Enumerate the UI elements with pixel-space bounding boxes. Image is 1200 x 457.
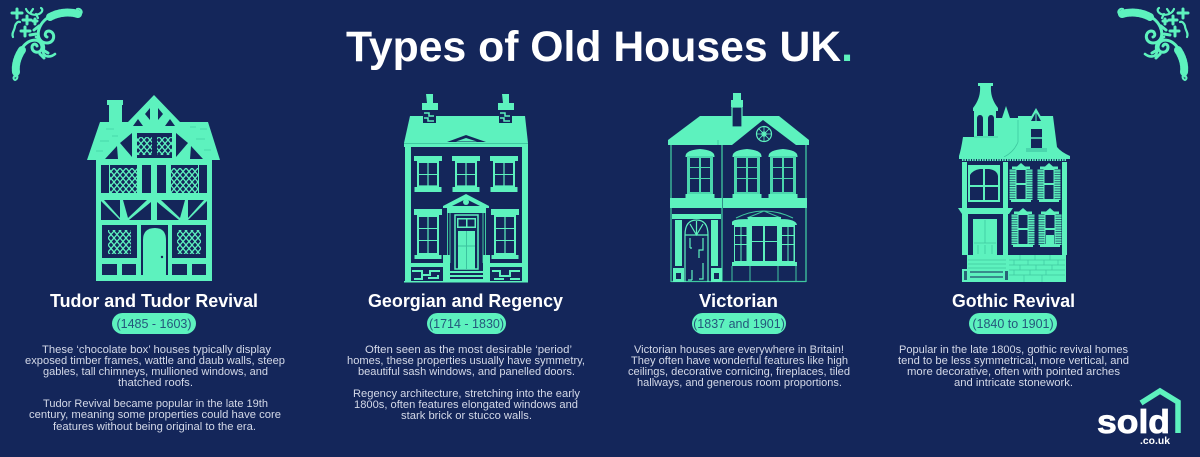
logo: sold.co.uk: sold <box>1097 403 1170 440</box>
date pill <box>969 313 1057 334</box>
body text: They often have wonderful features like high <box>631 355 848 367</box>
body text: exposed timber frames, wattle and daub walls, steep <box>25 355 285 367</box>
body text: features without being original to the era. <box>53 421 256 433</box>
date pill <box>427 313 506 334</box>
body text <box>898 344 1129 389</box>
body text: and intricate stonework. <box>954 377 1073 389</box>
panel: Georgian and Regency <box>347 94 585 422</box>
body text: more decorative, often with pointed arches <box>907 366 1121 378</box>
date pill <box>112 313 196 334</box>
body text: beautiful sash windows, and panelled doors. <box>358 366 575 378</box>
heading: Tudor and Tudor Revival <box>50 290 258 311</box>
body text: gables, tall chimneys, mullioned windows, and <box>43 366 268 378</box>
body text: Tudor Revival became popular in the late 19th <box>43 398 268 410</box>
body text: stark brick or stucco walls. <box>401 410 532 422</box>
body text: Victorian houses are everywhere in Britain! <box>634 344 844 356</box>
icon: Victorian house <box>668 93 809 282</box>
body text <box>347 344 585 422</box>
date pill: (1714 - 1830) <box>429 317 504 331</box>
date pill: (1485 - 1603) <box>116 317 192 331</box>
panel: Victorian <box>628 93 850 389</box>
body text: hallways, and generous room proportions. <box>637 377 842 389</box>
body text: Regency architecture, stretching into the early <box>353 388 581 400</box>
body text: century, meaning some properties could have core <box>29 409 281 421</box>
logo: sold.co.uk <box>1097 391 1178 447</box>
body text: These ‘chocolate box’ houses typically display <box>42 344 272 356</box>
panel: Gothic Revival <box>898 83 1129 389</box>
body text: 1800s, often features elongated windows and <box>354 399 578 411</box>
corner ornament: top left <box>12 8 82 80</box>
body text: homes, these properties usually have symmetry, <box>347 355 585 367</box>
date pill: (1840 to 1901) <box>972 317 1054 331</box>
logo: sold.co.uk: .co.uk <box>1140 435 1170 447</box>
heading: Georgian and Regency <box>368 290 564 311</box>
body text: tend to be less symmetrical, more vertical, and <box>898 355 1129 367</box>
heading: Victorian <box>699 290 778 311</box>
icon: Gothic house <box>958 83 1070 282</box>
body text <box>628 344 850 389</box>
panel: Tudor and Tudor Revival <box>25 95 285 433</box>
body text: thatched roofs. <box>118 377 193 389</box>
body text: ceilings, decorative cornicing, fireplaces, tiled <box>628 366 850 378</box>
body text <box>25 344 285 433</box>
title: Types of Old Houses UK. <box>346 23 853 71</box>
date pill <box>692 313 786 334</box>
icon: Georgian house <box>404 94 528 282</box>
date pill: (1837 and 1901) <box>693 317 785 331</box>
corner ornament: top right <box>1118 8 1188 80</box>
icon: Tudor house <box>87 95 220 281</box>
body text: Often seen as the most desirable ‘period’ <box>365 344 572 356</box>
heading: Gothic Revival <box>952 290 1075 311</box>
body text: Popular in the late 1800s, gothic revival homes <box>899 344 1129 356</box>
